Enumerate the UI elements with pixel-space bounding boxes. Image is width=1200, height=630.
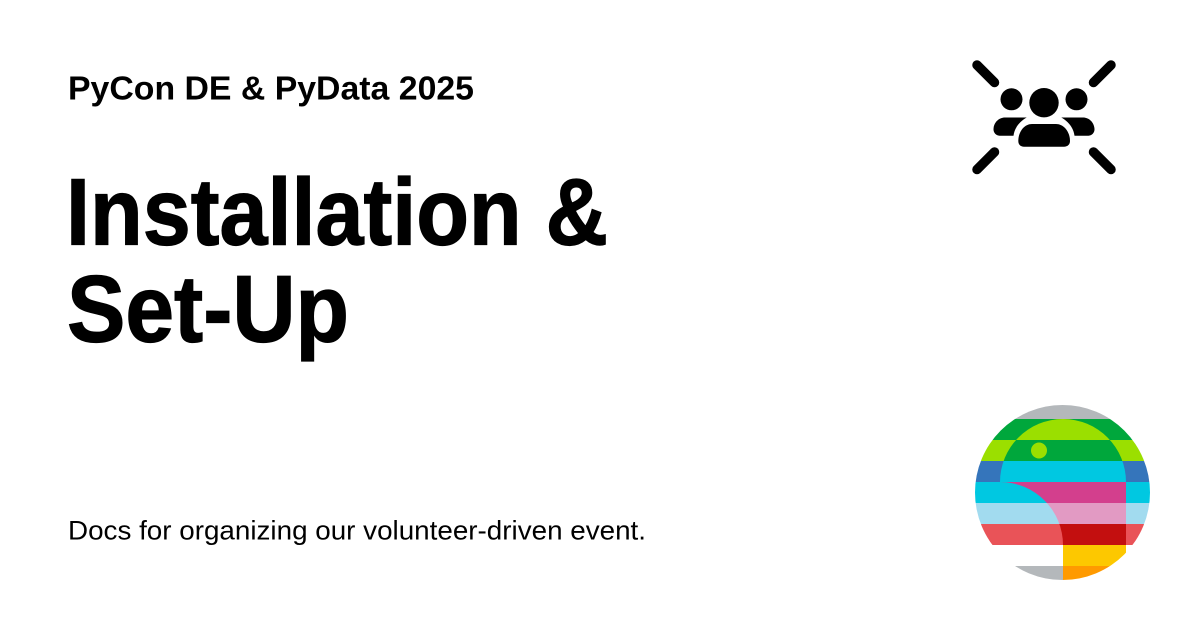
page title: [66, 160, 608, 362]
page title: Installation &: [66, 160, 608, 266]
icon rays: [977, 65, 1111, 170]
logo neck stripes: [990, 482, 1070, 545]
logo inner stripes: [1000, 419, 1126, 580]
description text: Docs for organizing our volunteer-driven event.: [68, 516, 646, 546]
logo eye: [1031, 442, 1047, 458]
logo: striped circle with python: [975, 405, 1150, 580]
icon: people with rays: [977, 65, 1111, 170]
logo outer stripes: [975, 405, 1150, 580]
icon people: [994, 88, 1094, 147]
social card: [68, 60, 1150, 580]
page title: Set-Up: [67, 256, 349, 362]
site name heading: PyCon DE & PyData 2025: [68, 70, 474, 106]
